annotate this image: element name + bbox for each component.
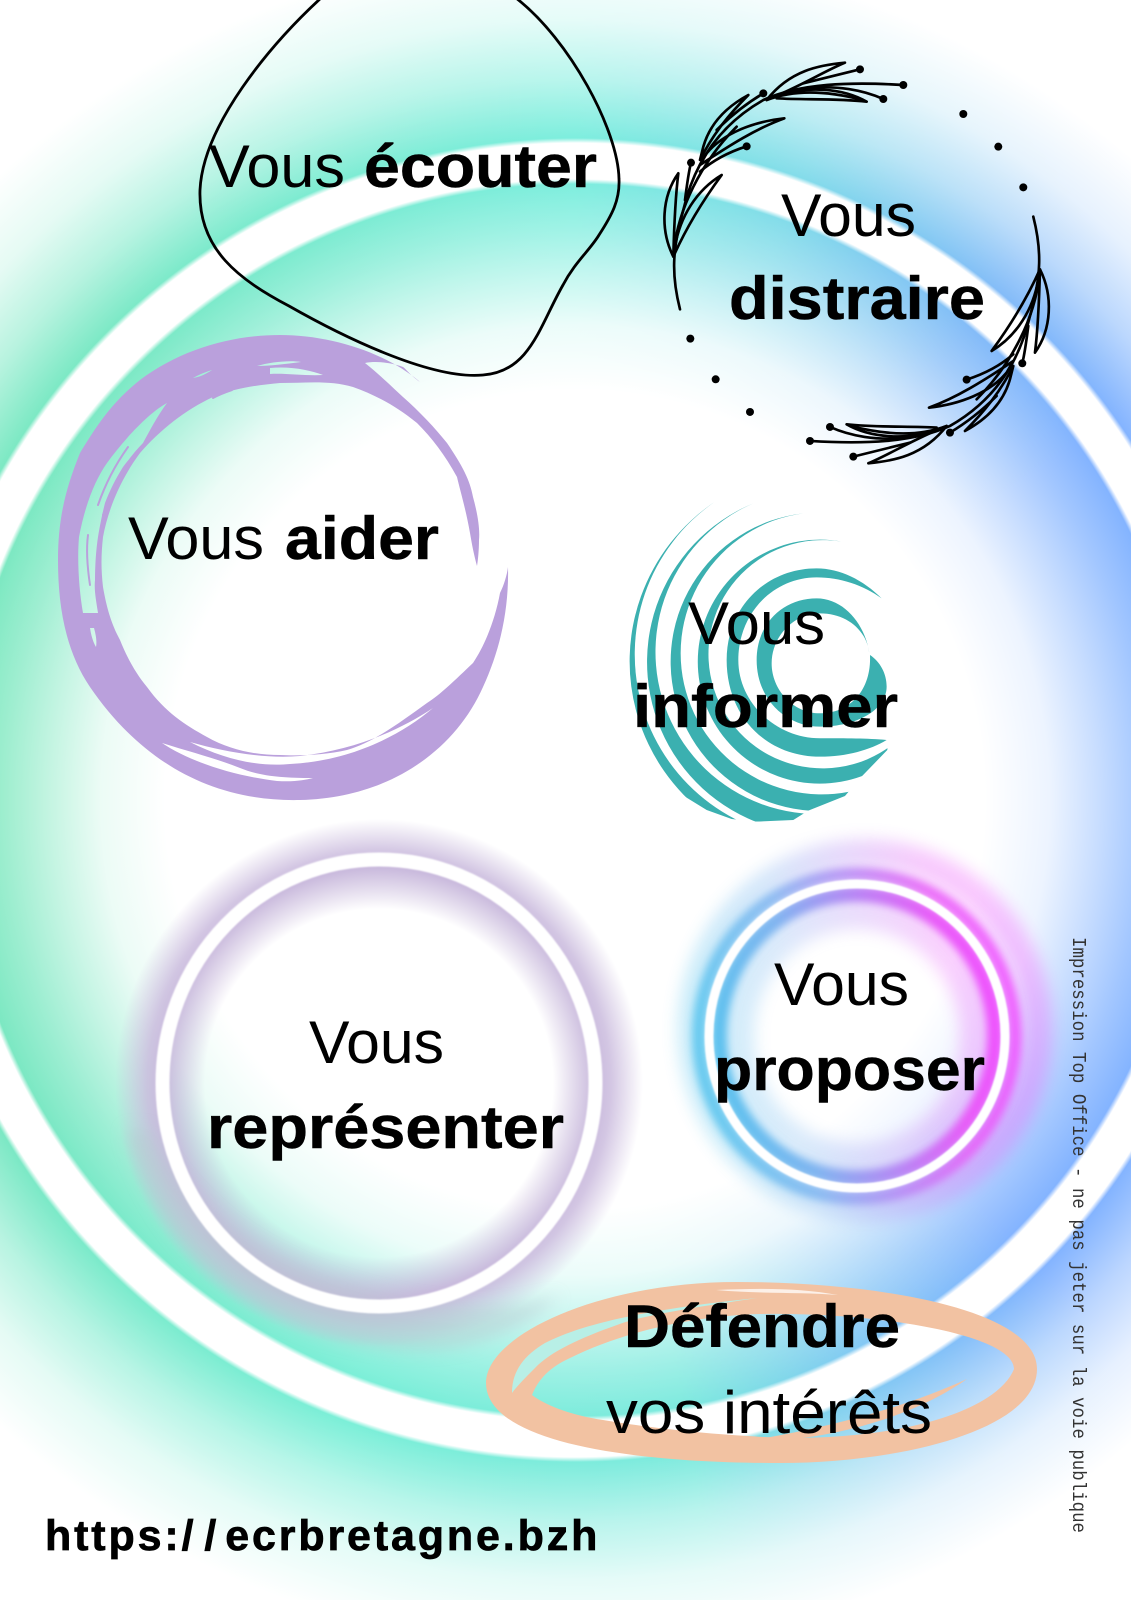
laurel wreath — [664, 63, 1049, 463]
label: Vous représenter: représenter — [207, 1094, 564, 1161]
label: Vous représenter: Vous — [309, 1009, 444, 1076]
brush streaks — [87, 390, 232, 585]
label: Vous informer: Vous — [688, 590, 825, 657]
brush ellipse: Défendre — [486, 1282, 1037, 1463]
label: Vous proposer — [714, 951, 985, 1103]
label: Vous aider: aider — [285, 505, 439, 572]
label: Vous distraire — [729, 182, 985, 332]
brush circle: Vous aider — [58, 335, 508, 800]
label: Défendre vos intérêts — [606, 1293, 932, 1446]
label: Vous représenter — [207, 1009, 564, 1161]
label: Défendre vos intérêts: vos intérêts — [606, 1379, 932, 1446]
blob outline: Vous écouter — [200, 0, 619, 375]
brush highlights — [512, 1289, 967, 1442]
glowing ring: Vous représenter — [89, 785, 669, 1381]
glowing ring: Vous proposer — [693, 854, 1037, 1206]
upper left branch — [664, 63, 907, 309]
label: Vous informer — [633, 590, 898, 740]
label: Défendre vos intérêts: Défendre — [624, 1293, 900, 1360]
label: Vous distraire: Vous — [781, 182, 916, 249]
label: Vous distraire: distraire — [729, 265, 985, 332]
label: Vous informer: informer — [633, 673, 898, 740]
website url: https://ecrbretagne.bzh — [45, 1512, 600, 1560]
label: Vous écouter: écouter — [364, 133, 597, 200]
label: Vous proposer: Vous — [774, 951, 909, 1018]
wreath dots — [686, 110, 1027, 416]
label: Vous aider: Vous — [128, 505, 264, 572]
vertical print notice: Impression Top Office - ne pas jeter sur la voie publique — [1067, 937, 1089, 1533]
label: Vous écouter: Vous — [209, 133, 345, 200]
label: Vous proposer: proposer — [714, 1036, 985, 1103]
spiral: Vous informer — [630, 502, 888, 822]
lower right branch — [806, 217, 1049, 463]
